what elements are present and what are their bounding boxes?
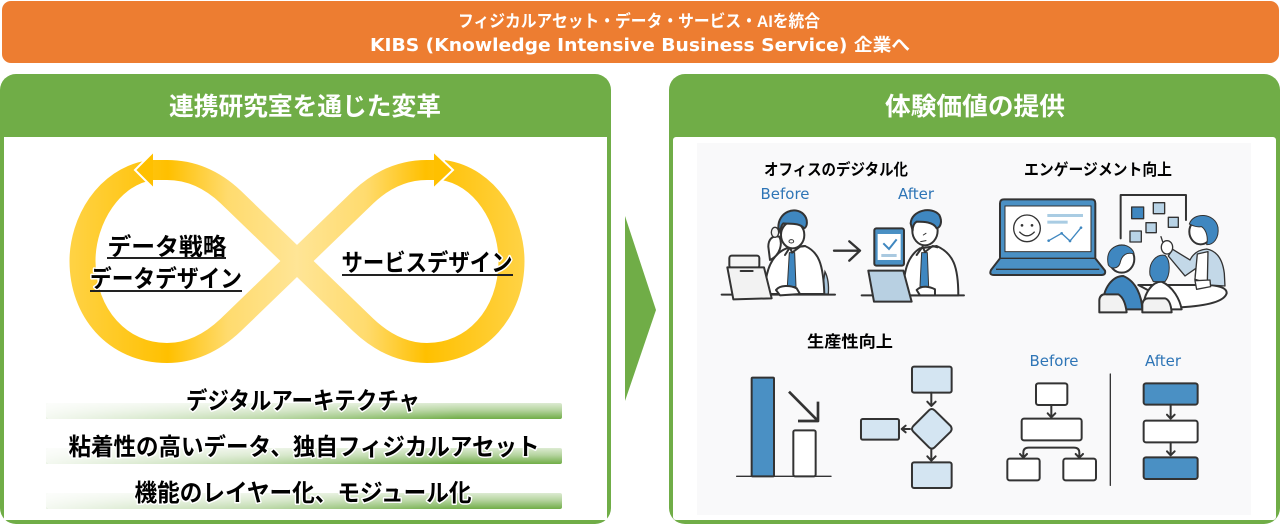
illustration: office digitalization: Before (760, 185, 810, 203)
label: data strategy: データ戦略 (108, 233, 226, 261)
arrow between panels (625, 216, 656, 401)
illustration: engagement improvement (990, 160, 1227, 312)
illustration: process before and after: After (1145, 352, 1182, 370)
layer bar: layering and modularization (46, 480, 562, 509)
illustration: productivity improvement (737, 332, 952, 488)
layer bar: sticky data and physical assets: 粘着性の高いデータ、独自フィジカルアセット (68, 433, 540, 461)
illustration: office digitalization: After (898, 185, 935, 203)
panel: delivering experience value (669, 74, 1280, 524)
illustration: office digitalization (722, 160, 964, 302)
illustration: office digitalization: オフィスのデジタル化 (764, 160, 908, 179)
infinity loop diagram (83, 152, 513, 353)
top banner (2, 1, 1279, 63)
illustration: engagement improvement: エンゲージメント向上 (1024, 160, 1172, 179)
label: data strategy: データデザイン (90, 265, 242, 293)
heading: right panel: 体験価値の提供 (885, 93, 1065, 121)
layer bar: digital architecture (46, 387, 562, 419)
illustration: process before and after (1007, 352, 1198, 485)
top banner: フィジカルアセット・データ・サービス・AIを統合 (458, 11, 820, 31)
layer bar: digital architecture: デジタルアーキテクチャ (186, 387, 420, 415)
illustration: process before and after: Before (1030, 352, 1078, 370)
illustration: productivity improvement: 生産性向上 (807, 332, 893, 351)
heading: left panel: 連携研究室を通じた変革 (169, 93, 441, 121)
top banner: KIBS (Knowledge Intensive Business Service) 企業へ (370, 35, 910, 56)
label: data strategy (90, 233, 242, 293)
panel: transformation through joint labs (0, 74, 611, 524)
layer bar: layering and modularization: 機能のレイヤー化、モジュール化 (134, 480, 472, 507)
label: service design: サービスデザイン (342, 249, 512, 277)
